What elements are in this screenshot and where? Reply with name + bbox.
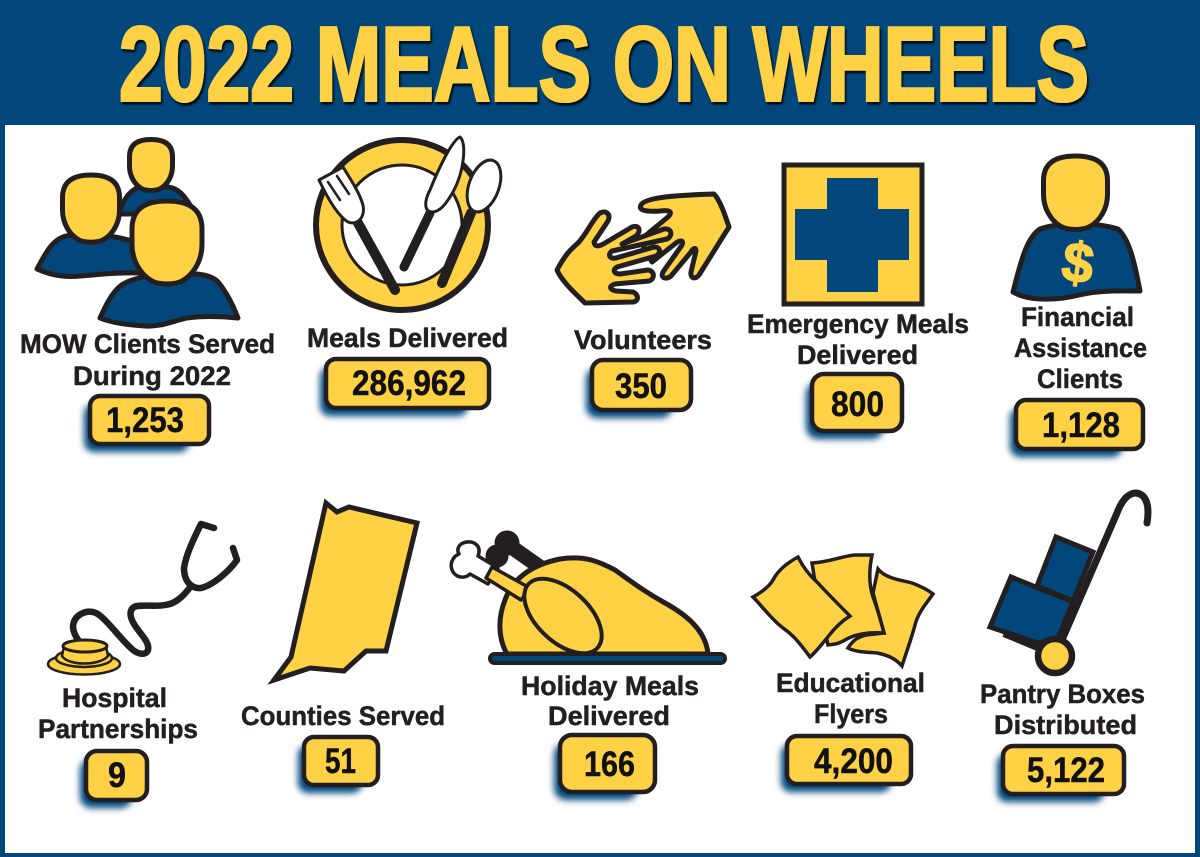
label: Volunteers [574,325,712,355]
label [1014,302,1147,394]
panel: hospital partnerships [38,524,237,808]
value badge [80,751,147,808]
icon: person with dollar [1013,156,1140,299]
value badge: 51 [325,742,356,781]
value badge [806,374,902,439]
label: Delivered [797,340,918,370]
label [38,683,198,744]
icon: joined hands [557,194,729,303]
panel: emergency meals [747,165,969,439]
value badge: 1,253 [106,401,184,440]
label: Delivered [548,701,670,731]
value badge: 286,962 [352,364,466,403]
label: MOW Clients Served [20,329,275,359]
panel: holiday meals [451,533,725,800]
value badge: 9 [108,756,126,795]
label [980,679,1145,740]
value badge: 5,122 [1027,751,1105,790]
icon: medical cross [784,165,922,304]
value badge: 4,200 [814,742,893,781]
label: During 2022 [73,361,231,391]
panel: pantry boxes [980,493,1148,802]
label [747,309,969,370]
icon: flyers [753,555,933,666]
label: Counties Served [241,701,445,731]
panel: MOW clients served [20,140,275,452]
value badge: 350 [615,367,667,406]
value badge [997,746,1124,802]
icon: stethoscope [48,524,237,674]
label: Meals Delivered [307,323,508,353]
icon: Indiana map [274,503,417,680]
label: Distributed [994,710,1137,740]
label: Emergency Meals [747,309,969,339]
icon: turkey [451,533,725,667]
value badge [586,360,691,418]
label: Flyers [814,699,888,729]
label: Partnerships [38,714,198,744]
label [20,329,275,391]
panel: financial assistance [1010,156,1147,457]
value badge [298,737,378,793]
label: Assistance [1014,333,1147,363]
label: Holiday Meals [521,671,699,701]
value badge: 800 [831,385,884,424]
label: Educational [776,668,925,698]
label: Pantry Boxes [980,679,1145,709]
value badge: 166 [584,745,635,784]
label [776,668,925,729]
label: Clients [1037,364,1123,394]
value badge [554,735,655,800]
panel: educational flyers [753,555,933,792]
value badge [320,359,489,416]
icon: hand truck with boxes [990,493,1148,673]
icon: plate and cutlery [316,137,507,310]
value badge [84,396,209,452]
icon: three people [37,140,238,326]
value badge: 1,128 [1042,406,1120,445]
label: Financial [1021,302,1134,332]
panel: counties served [241,503,445,793]
panel: volunteers [557,194,729,418]
value badge [781,736,911,792]
dollar sign: $ [1058,229,1098,296]
value badge [1010,400,1143,457]
panel: meals delivered [307,137,508,416]
label: Hospital [62,683,167,713]
label [521,671,699,731]
